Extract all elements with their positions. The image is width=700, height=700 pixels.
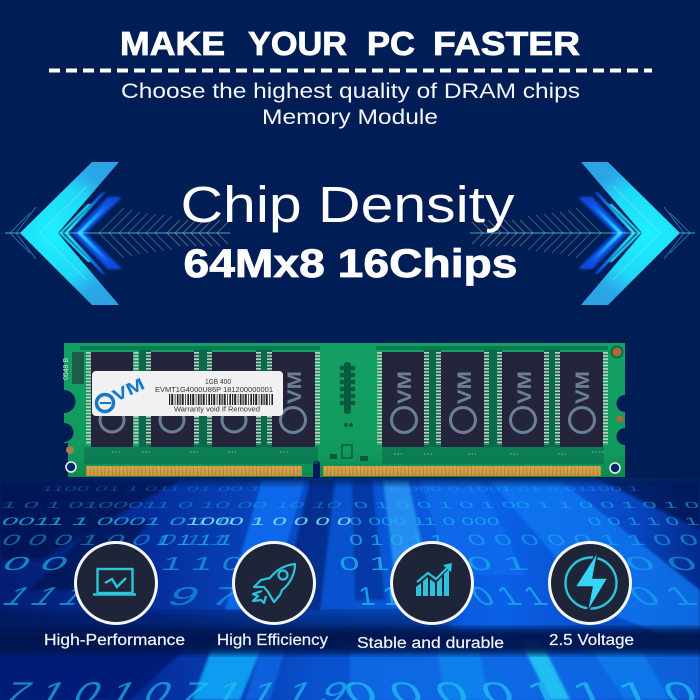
circuit board bbox=[62, 343, 625, 477]
chip 7: VM bbox=[515, 371, 536, 404]
EVM logo bbox=[96, 374, 148, 412]
binary digit rows: 0 1 0 1 1 bbox=[348, 532, 446, 549]
feature: high performance bbox=[44, 542, 185, 649]
label band bbox=[0, 628, 700, 654]
title: YOUR bbox=[248, 25, 347, 62]
traces bbox=[80, 346, 608, 464]
binary digit rows: 1 1 bbox=[357, 581, 401, 611]
label: 2.5 Voltage bbox=[549, 632, 634, 649]
mounting holes and pads bbox=[66, 346, 624, 473]
EVM logo: VM bbox=[110, 374, 148, 406]
feature: voltage bbox=[549, 542, 634, 649]
binary digit rows: 1100 01 1 011 01 00 1 bbox=[39, 485, 264, 493]
light beams bbox=[0, 480, 700, 700]
binary digit rows: 0 1 bbox=[621, 583, 700, 611]
chip 3 bbox=[210, 352, 258, 447]
dashed divider bbox=[49, 68, 652, 72]
chip 2: VM bbox=[164, 371, 185, 404]
icon: growth chart bbox=[416, 563, 452, 596]
binary digit rows: 0 1 1 bbox=[464, 583, 554, 611]
chip 4: VM bbox=[285, 371, 306, 404]
top fade bbox=[0, 476, 700, 488]
memory module bbox=[62, 343, 625, 477]
binary digit rows: 0 1 bbox=[463, 554, 532, 575]
heading: chip spec: 64Mx8 16Chips bbox=[184, 242, 518, 286]
title: FASTER bbox=[433, 25, 580, 62]
feature: high efficiency bbox=[217, 542, 328, 649]
label: High Efficiency bbox=[217, 632, 328, 649]
chip 3: VM bbox=[225, 371, 246, 404]
product sticker bbox=[92, 371, 283, 416]
left arrow bbox=[5, 162, 230, 305]
binary digit rows: 0 1 0 0 1 0 1 00 1 1 0 0 1 0 1 0 bbox=[352, 500, 700, 510]
memory module: 0549 B bbox=[63, 357, 70, 380]
binary digit rows: 1 0 1 0100011 0 10 00 10 10 bbox=[0, 501, 346, 511]
binary digit rows: 1000 1 0 0 0 0 bbox=[184, 516, 353, 528]
chip 6 bbox=[438, 352, 486, 447]
icon: lightning bolt bbox=[566, 551, 616, 613]
binary digit rows: 0 0 1 1 0 1 bbox=[585, 516, 700, 528]
chip 6: VM bbox=[455, 371, 476, 404]
center via pattern bbox=[330, 362, 368, 461]
chip 7 bbox=[500, 352, 546, 447]
icon: laptop chart bbox=[93, 569, 136, 594]
binary floor background bbox=[0, 476, 700, 700]
feature: stable and durable bbox=[357, 542, 504, 652]
chip 5 bbox=[380, 352, 426, 447]
label: High-Performance bbox=[44, 632, 185, 649]
chip 1 bbox=[88, 352, 136, 447]
binary digit rows: 9 7 bbox=[162, 582, 248, 611]
product sticker: Warranty void If Removed bbox=[174, 406, 260, 414]
chip 2 bbox=[148, 352, 196, 447]
heading: chip density: Chip Density bbox=[180, 176, 515, 233]
chip 1: VM bbox=[103, 371, 124, 404]
binary digit rows bbox=[0, 484, 700, 700]
binary digit rows: 0 0 0 0 0 1 1 0 0 bbox=[464, 533, 700, 549]
chip 5: VM bbox=[395, 371, 416, 404]
chip 4 bbox=[270, 352, 318, 447]
product sticker: EVMT1G4000U86P 181200000001 bbox=[155, 387, 273, 394]
binary digit rows: 0 0 bbox=[620, 554, 700, 575]
binary digit rows: 0 1 bbox=[339, 554, 390, 575]
subtitle bbox=[121, 79, 580, 129]
binary digit rows: 1 1 0 1 1 bbox=[158, 554, 306, 575]
icon: rocket bbox=[253, 564, 295, 603]
chip 8: VM bbox=[573, 371, 594, 404]
binary digit rows: 0 000 0 1001 01 0 01100 1 bbox=[388, 484, 641, 493]
chip 8 bbox=[558, 352, 606, 447]
subtitle: Memory Module bbox=[262, 105, 438, 129]
binary digit rows: 0011 1 0001 0 1 0 bbox=[0, 515, 239, 528]
title: MAKE bbox=[120, 25, 225, 62]
gold contacts bbox=[86, 466, 601, 476]
binary digit rows: 0 0 0 1 0 0 0 1 1 bbox=[0, 532, 233, 549]
right arrow bbox=[470, 162, 695, 305]
label: Stable and durable bbox=[357, 635, 504, 652]
binary digit rows: 1 1 1 1 bbox=[153, 533, 236, 549]
binary digit rows: 0 000 11 0 000 bbox=[348, 516, 501, 528]
title: PC bbox=[367, 25, 415, 62]
left components bbox=[72, 352, 84, 384]
subtitle: Choose the highest quality of DRAM chips bbox=[121, 79, 580, 103]
barcode bbox=[169, 394, 274, 405]
product sticker: 1GB 400 bbox=[205, 377, 231, 386]
title bbox=[120, 25, 580, 62]
